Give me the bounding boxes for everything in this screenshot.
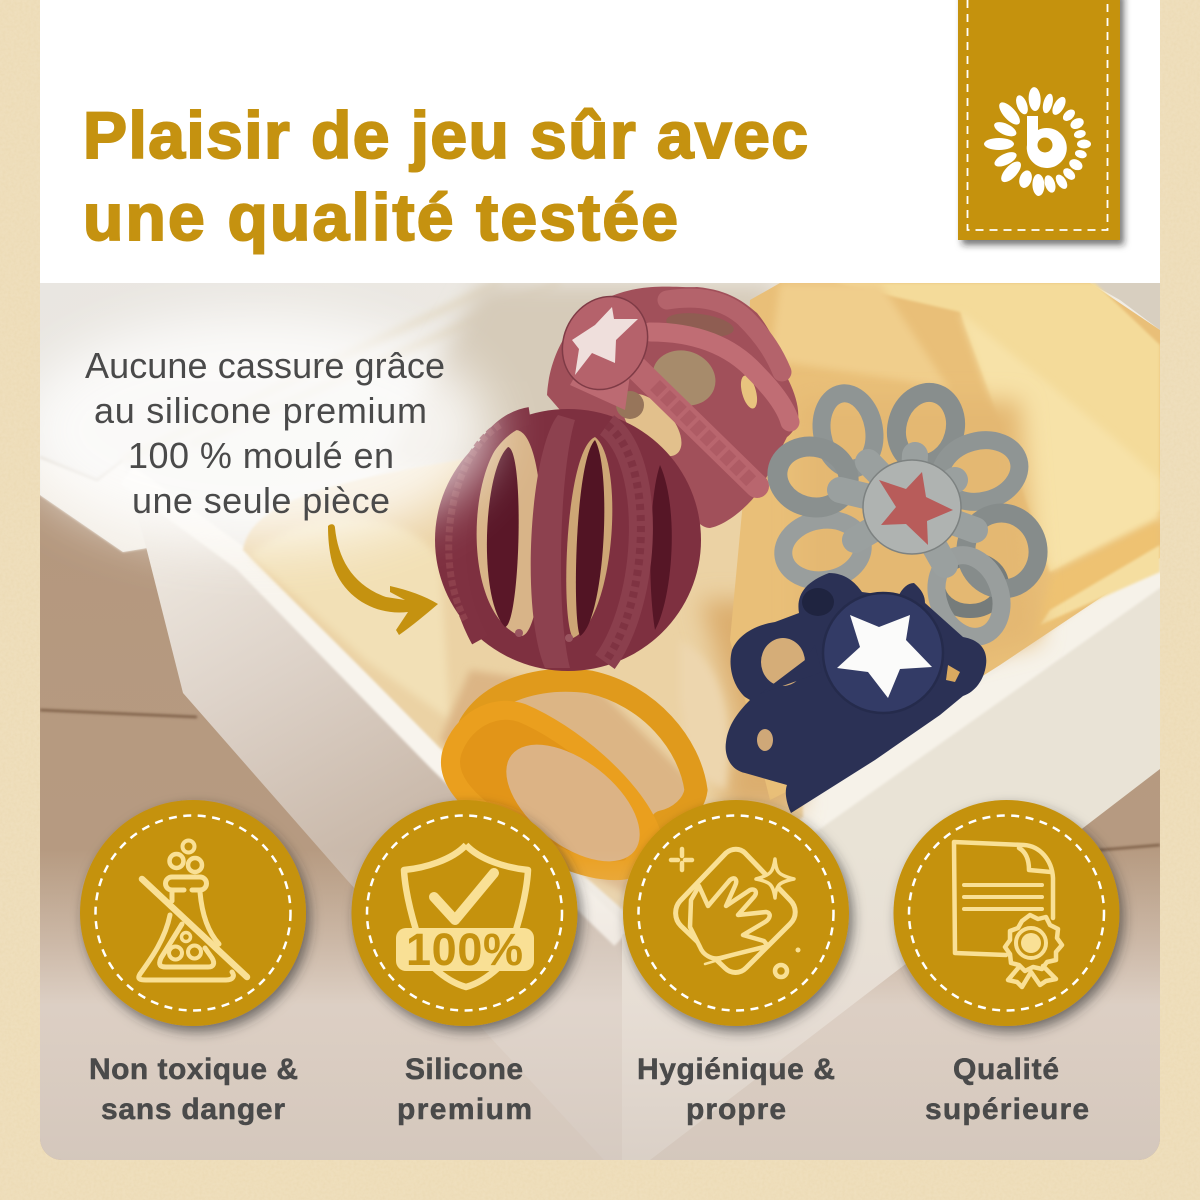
callout text: une seule pièce bbox=[132, 480, 390, 521]
box back and flap bbox=[40, 283, 1160, 940]
badge: superior quality bbox=[894, 800, 1120, 1026]
toy: navy ball bbox=[726, 573, 986, 813]
label: premium silicone bbox=[397, 1053, 532, 1126]
white header panel bbox=[40, 0, 1160, 284]
label: premium silicone: premium bbox=[397, 1093, 532, 1126]
callout text: au silicone premium bbox=[94, 390, 427, 431]
icon: sunflower b logo bbox=[984, 87, 1091, 196]
wooden floor bbox=[40, 495, 1160, 1160]
white star on navy ball bbox=[837, 615, 932, 698]
right box wall bbox=[622, 558, 1160, 1160]
toy: burgundy ball bbox=[435, 409, 701, 671]
icon: certificate with rosette bbox=[954, 842, 1062, 987]
callout text: Aucune cassure grâce bbox=[85, 345, 445, 386]
cloth: centre fold bbox=[243, 300, 803, 925]
badge: non toxic bbox=[80, 800, 306, 1026]
white star on pink ball bbox=[572, 307, 638, 375]
callout text bbox=[85, 345, 445, 521]
pink ball ribs bbox=[667, 298, 782, 372]
badge: hygienic bbox=[623, 800, 849, 1026]
flower centre disc bbox=[863, 460, 961, 554]
label: superior quality bbox=[925, 1053, 1089, 1126]
title: une qualité testée bbox=[83, 180, 678, 254]
title: Plaisir de jeu sûr avec bbox=[83, 98, 808, 172]
label: hygienic: propre bbox=[686, 1093, 786, 1126]
box interior shadow bbox=[406, 283, 778, 464]
product photo panel bbox=[20, 281, 1160, 1160]
label: superior quality: supérieure bbox=[925, 1093, 1089, 1126]
toy: yellow ball bbox=[450, 680, 696, 884]
icon: shield with 100%: 100% bbox=[406, 924, 523, 975]
label: non toxic: sans danger bbox=[101, 1093, 285, 1126]
icon: hand wiping cloth bbox=[671, 849, 800, 977]
title bbox=[83, 98, 808, 254]
white glow behind callout bbox=[20, 315, 490, 545]
label: hygienic: Hygiénique & bbox=[637, 1053, 835, 1086]
badge: premium silicone bbox=[352, 800, 578, 1026]
toy: grey flower bbox=[770, 386, 1044, 646]
toy: pink ball bbox=[546, 281, 798, 528]
pink ball holes bbox=[666, 313, 734, 336]
label: non toxic: Non toxique & bbox=[89, 1053, 298, 1086]
label: non toxic bbox=[89, 1053, 298, 1126]
bottom fade overlay bbox=[40, 850, 1160, 1160]
red star on flower bbox=[879, 472, 953, 545]
brand tag bbox=[958, 0, 1120, 240]
label: superior quality: Qualité bbox=[953, 1053, 1059, 1086]
icon: shield with 100% bbox=[396, 845, 534, 987]
left box wall bbox=[146, 548, 622, 1003]
cloth: upper right bbox=[730, 283, 1160, 800]
label: hygienic bbox=[637, 1053, 835, 1126]
sparkles bbox=[756, 859, 794, 898]
callout text: 100 % moulé en bbox=[128, 435, 394, 476]
label: premium silicone: Silicone bbox=[405, 1053, 523, 1086]
arrow pointing at ball bbox=[328, 524, 438, 635]
icon: crossed-out flask bbox=[139, 840, 247, 980]
